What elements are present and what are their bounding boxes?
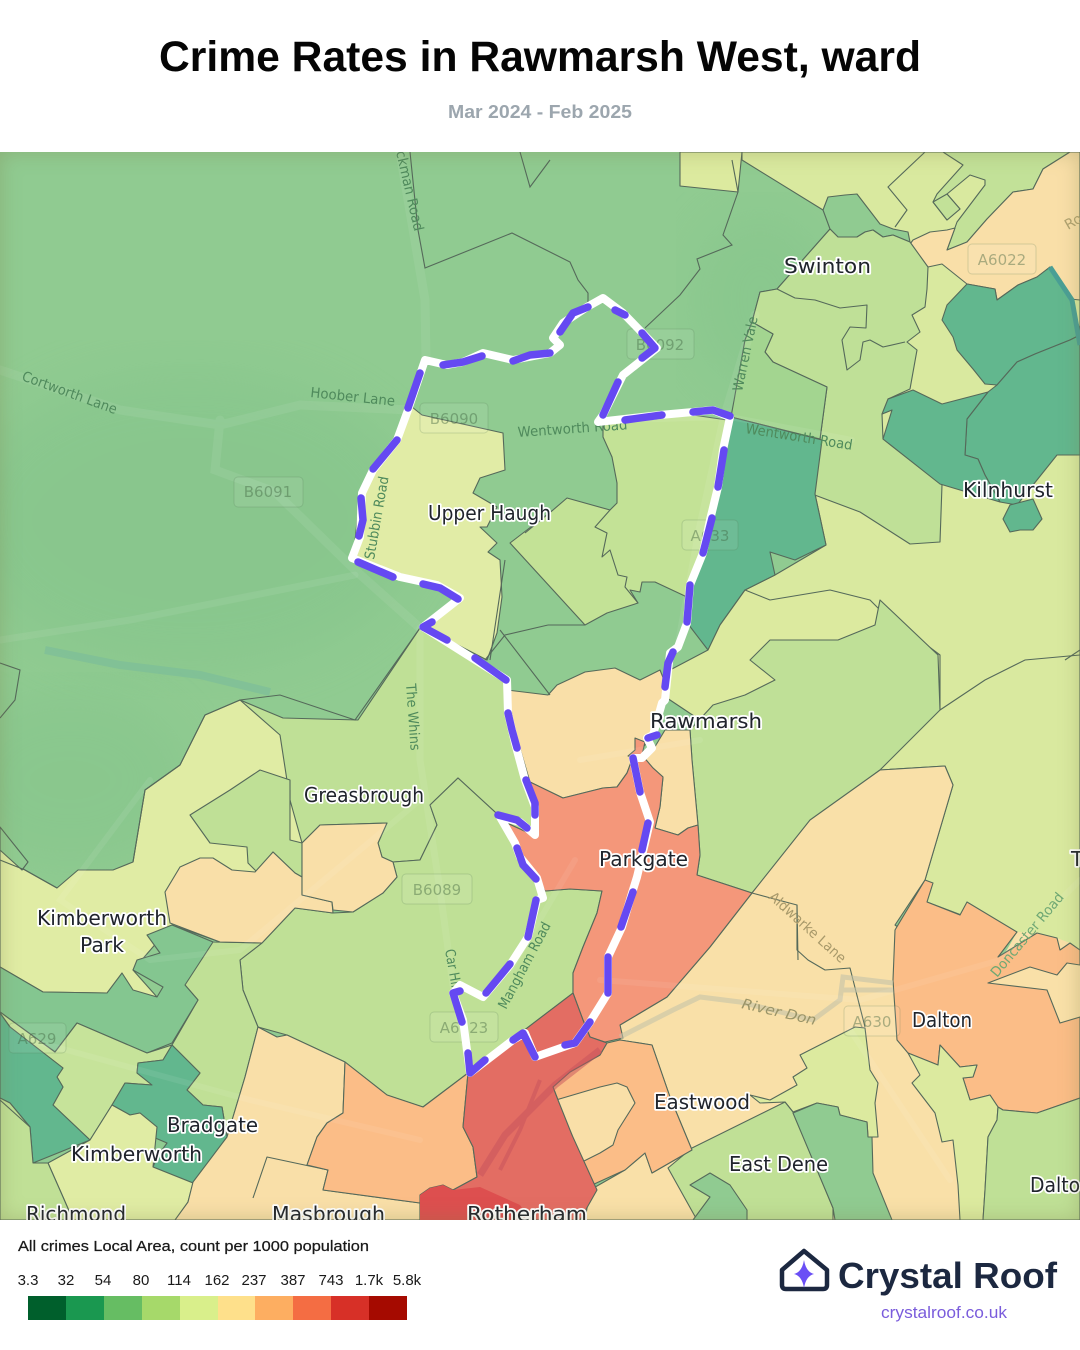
legend colour bar [28,1296,407,1320]
shield: A6123: A6123 [440,1019,488,1037]
area: Swinton inner boundary [777,289,905,370]
area: Dalton south pale lime [908,1045,998,1220]
area: far-west teal [0,1013,90,1163]
road and river name labels: Stubbin Road [362,475,393,561]
logo icon: house with star [782,1251,827,1289]
place name labels: Kilnhurst [963,478,1053,502]
shield: A6022: A6022 [978,251,1026,269]
shield: A6123 [430,1012,498,1042]
area: Masbrough sand [175,1027,420,1220]
railway stripes through Rotherham [480,1050,600,1175]
rivers and canals [620,977,893,1037]
area: west top green sliver [0,827,28,870]
Crystal Roof logo and website [780,1248,1058,1322]
area: small Kilnhurst teal [1003,499,1042,532]
road and river name labels: The Whins [402,682,423,751]
road and river name labels: Wentworth Road [517,417,628,441]
legend tick values [18,1272,422,1289]
river canal [1050,267,1080,345]
place name labels: Dalton [912,1008,972,1032]
area: south-west light green [0,1012,172,1140]
road and river name labels: River Don [740,996,818,1029]
legend tick values: 114 [167,1272,191,1289]
shield: A629 [9,1023,66,1053]
legend tick values: 54 [95,1272,111,1289]
area: mid-teal west [0,925,213,1053]
area: central south light green [240,778,602,1107]
area: eastern sand [585,766,1000,1220]
title: Crime Rates in Rawmarsh West, ward [159,33,921,81]
legend tick values: 743 [318,1272,344,1289]
ward outline purple dashes [358,307,730,1073]
area: Dalton sand behind [988,932,1080,1050]
area: Kilnhurst west teal [882,390,1000,502]
shield: B6092: B6092 [636,336,684,354]
legend tick values: 1.7k [355,1272,384,1289]
map base: low crime green [0,152,1080,1220]
shield: A629: A629 [18,1030,56,1048]
road and river name labels: Wentworth Road [744,421,854,454]
ward boundary: Rawmarsh West (white casing with purple dashes) [352,298,730,1073]
legend tick values: 162 [204,1272,230,1289]
place name labels: East Dene [729,1152,828,1176]
road and river name labels: Doncaster Road [988,890,1068,981]
area: East Dene mid green [793,1103,892,1220]
area: sand Thorpe Hesley side [165,852,333,943]
place name labels: Greasbrough [304,783,424,807]
area: Rotherham red, very high crime [420,993,607,1220]
area: Eastwood east pale lime [750,1027,878,1137]
legend tick values: 387 [280,1272,306,1289]
area: Masbrough inner boundary [253,1157,328,1198]
area: Rawmarsh east sand [640,730,698,835]
area: Kimberworth pale lime [48,1105,193,1220]
area: Swinton light green [752,229,942,544]
ward outline white casing [352,298,730,1073]
area: Rawmarsh west sand [507,668,668,798]
area: Swinton north green band [823,194,910,242]
area: eastern pale lime [697,152,1080,960]
area: east of Rawmarsh light green [690,600,940,893]
place name labels: Parkgate [599,847,688,871]
area: Rotherham centre dark red [420,1185,530,1220]
legend tick values: 80 [133,1272,149,1289]
area: Eastwood inner boundaries [797,905,865,1027]
area: Rawmarsh north pale lime [667,590,940,720]
place name labels: Eastwood [654,1090,750,1114]
website url: crystalroof.co.uk [881,1304,1008,1322]
legend tick values: 237 [241,1272,267,1289]
area: ward centre light green [510,415,727,625]
logo wordmark: Crystal Roof [838,1255,1058,1296]
road number shields [9,244,1036,1053]
shield: A6022 [968,244,1036,274]
area: west pale lime [0,700,302,997]
area: north-east light green [933,152,1070,250]
area: East Dene light green [668,1102,833,1220]
area: Kimberworth Park north patch [190,770,302,877]
area: small light green blob [933,194,960,220]
road and river name labels: Warren Vale [730,315,762,393]
legend: crime colour scale [18,1238,422,1320]
road and river name labels [20,149,1080,1029]
road and river name labels: Car Hill [441,948,464,992]
place name labels: Kimberworth [37,906,167,930]
area: Upper Haugh pale lime [353,407,505,660]
place name labels: Swinton [784,254,871,278]
shield: B6089 [402,874,472,904]
area: Greasbrough light green [240,628,535,862]
shield: A630 [844,1006,900,1036]
area: top strip pale lime [680,152,742,192]
area: Bradgate teal [112,1045,227,1183]
shield: B6089: B6089 [413,881,461,899]
road and river name labels: Cortworth Lane [20,369,119,418]
area: bottom-left corner light green [0,1098,73,1220]
shield: B6090: B6090 [430,410,478,428]
area boundary lines [0,152,1080,1127]
area: Wentworth side green [731,322,827,439]
shield: B6092 [627,329,694,359]
subtitle: date range: Mar 2024 - Feb 2025 [448,102,632,122]
area: west mid light green [172,925,262,1137]
legend tick values: 3.3 [18,1272,38,1289]
shield: A633 [682,520,738,550]
area: south-east light green [983,1098,1080,1220]
place name labels: Upper Haugh [428,501,551,525]
area: sand pocket [556,1083,635,1165]
area: Kilnhurst east teal [965,335,1080,505]
shield: A633: A633 [691,527,729,545]
area: north-east teal [942,267,1080,385]
river west [45,650,270,692]
area: sand north of B6089 [302,823,397,912]
area: small mid green south [690,1173,747,1220]
legend tick values: 5.8k [393,1272,422,1289]
road network highlights [0,152,1080,1180]
place name labels [26,254,1080,1226]
legend tick values: 32 [58,1272,74,1289]
place name labels: Rawmarsh [650,709,762,733]
place name labels: Kimberworth [71,1142,202,1166]
area: Eastwood west orange [553,1040,692,1185]
area: teal east of ward [685,417,826,650]
area: Dalton orange [893,880,1080,1113]
road and river name labels: Mangham Road [495,920,555,1012]
road and river name labels: Hoober Lane [310,385,396,410]
shield: B6090 [420,403,488,433]
place name labels: Park [80,933,124,957]
area: Parkgate salmon, high crime [507,738,752,1042]
choropleth map [0,152,1080,1220]
shield: B6091 [234,477,303,507]
shield: B6091: B6091 [244,483,292,501]
area: Masbrough orange [307,1062,477,1203]
shield: A630: A630 [853,1013,891,1031]
area: north-east sand [900,152,1080,300]
area: ward centre inner boundary [595,510,638,603]
road and river name labels: Aldwarke Lane [765,889,849,967]
place name labels: Bradgate [167,1113,258,1137]
legend title: All crimes Local Area, count per 1000 population [18,1238,369,1255]
